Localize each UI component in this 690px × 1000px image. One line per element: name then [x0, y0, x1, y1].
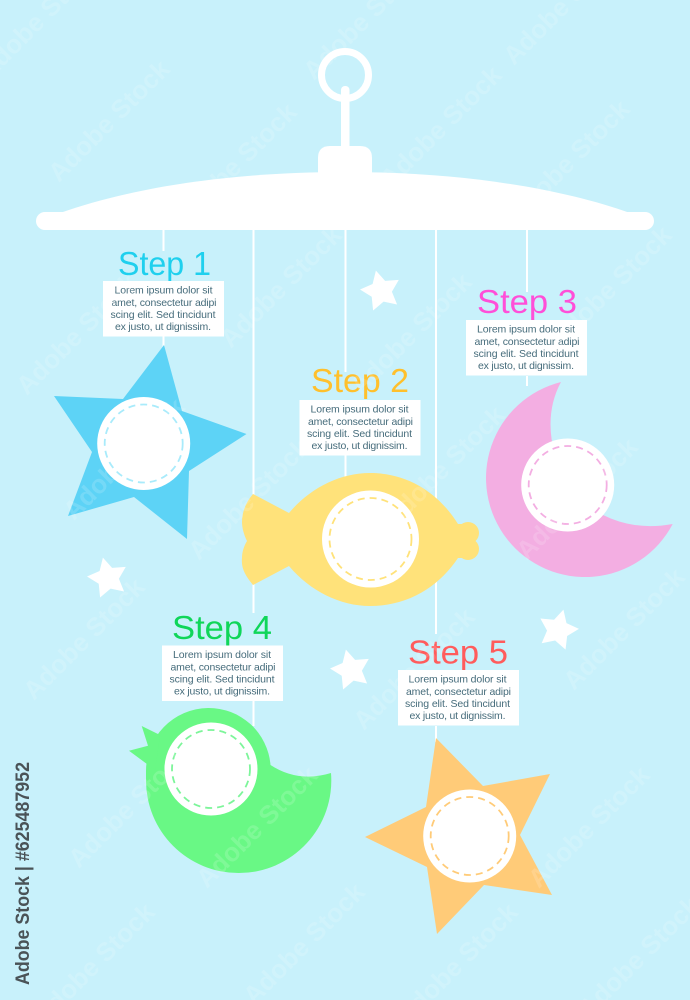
- stock watermarks: Adobe Stock: [510, 431, 644, 565]
- step 1 label: Step 1: [118, 245, 211, 282]
- stock watermarks: Adobe Stock: [544, 219, 678, 353]
- step 2: yellow fish: [242, 473, 479, 606]
- mobile hanger: [36, 52, 654, 230]
- step 5 label: [398, 634, 519, 726]
- step 5 label: Step 5: [408, 634, 508, 670]
- stock watermarks: Adobe Stock: [522, 759, 656, 893]
- stock watermarks: Adobe Stock: [169, 96, 303, 230]
- step 3 label: ex justo, ut dignissim.: [478, 360, 574, 372]
- step 3 label: Step 3: [477, 283, 577, 320]
- stock watermarks: Adobe Stock: [347, 601, 481, 735]
- step 2 label: amet, consectetur adipi: [308, 416, 413, 428]
- step 4 label: amet, consectetur adipi: [170, 662, 276, 674]
- stock watermarks: Adobe Stock: [57, 391, 191, 525]
- step 5: orange star: [365, 738, 552, 934]
- stock watermarks: Adobe Stock: [10, 266, 144, 400]
- step 3: pink moon: [486, 382, 673, 577]
- stock id label: Adobe Stock | #625487952: [13, 762, 34, 985]
- stock watermarks: Adobe Stock: [374, 59, 508, 193]
- step 5 label: ex justo, ut dignissim.: [410, 710, 506, 722]
- step 4 label: Step 4: [172, 609, 272, 646]
- step 4 label: scing elit. Sed tincidunt: [170, 674, 275, 686]
- step 1: blue star: [54, 345, 246, 539]
- step 3 label: amet, consectetur adipi: [474, 336, 580, 348]
- stock watermarks: Adobe Stock: [182, 431, 316, 565]
- step 1 label: Lorem ipsum dolor sit: [114, 285, 213, 297]
- step 2 label: scing elit. Sed tincidunt: [307, 428, 412, 440]
- stock watermarks: Adobe Stock: [42, 53, 176, 187]
- step 5 label: amet, consectetur adipi: [406, 686, 511, 698]
- step 2 label: [300, 362, 420, 456]
- step 4 label: Lorem ipsum dolor sit: [173, 649, 271, 661]
- step 1 label: amet, consectetur adipi: [112, 297, 216, 309]
- step 5 label: scing elit. Sed tincidunt: [405, 698, 510, 710]
- stock watermarks: Adobe Stock: [62, 739, 196, 873]
- stock watermarks: Adobe Stock: [344, 266, 478, 400]
- step 1 label: [103, 245, 224, 336]
- stock watermarks: Adobe Stock: [557, 561, 690, 695]
- stock watermarks: Adobe Stock: [190, 759, 324, 893]
- step 1 label: scing elit. Sed tincidunt: [110, 309, 216, 321]
- step 3 label: [466, 283, 587, 376]
- step 5 label: Lorem ipsum dolor sit: [408, 674, 507, 686]
- step 4 label: [162, 609, 283, 701]
- step 3 label: scing elit. Sed tincidunt: [474, 348, 579, 360]
- step 2 label: Step 2: [311, 362, 409, 399]
- step 4 label: ex justo, ut dignissim.: [174, 686, 270, 698]
- decorative small stars: [87, 271, 583, 690]
- stock watermarks: Adobe Stock: [502, 93, 636, 227]
- step 2 label: Lorem ipsum dolor sit: [310, 404, 409, 416]
- step 4: green bird: [129, 708, 331, 873]
- stock watermarks: Adobe Stock: [214, 219, 348, 353]
- step 1 label: ex justo, ut dignissim.: [115, 321, 211, 333]
- stock watermarks: Adobe Stock: [377, 399, 511, 533]
- step 2 label: ex justo, ut dignissim.: [312, 440, 408, 452]
- stock watermarks: Adobe Stock: [17, 571, 151, 705]
- hanging strings: [164, 228, 527, 742]
- step 3 label: Lorem ipsum dolor sit: [477, 324, 575, 336]
